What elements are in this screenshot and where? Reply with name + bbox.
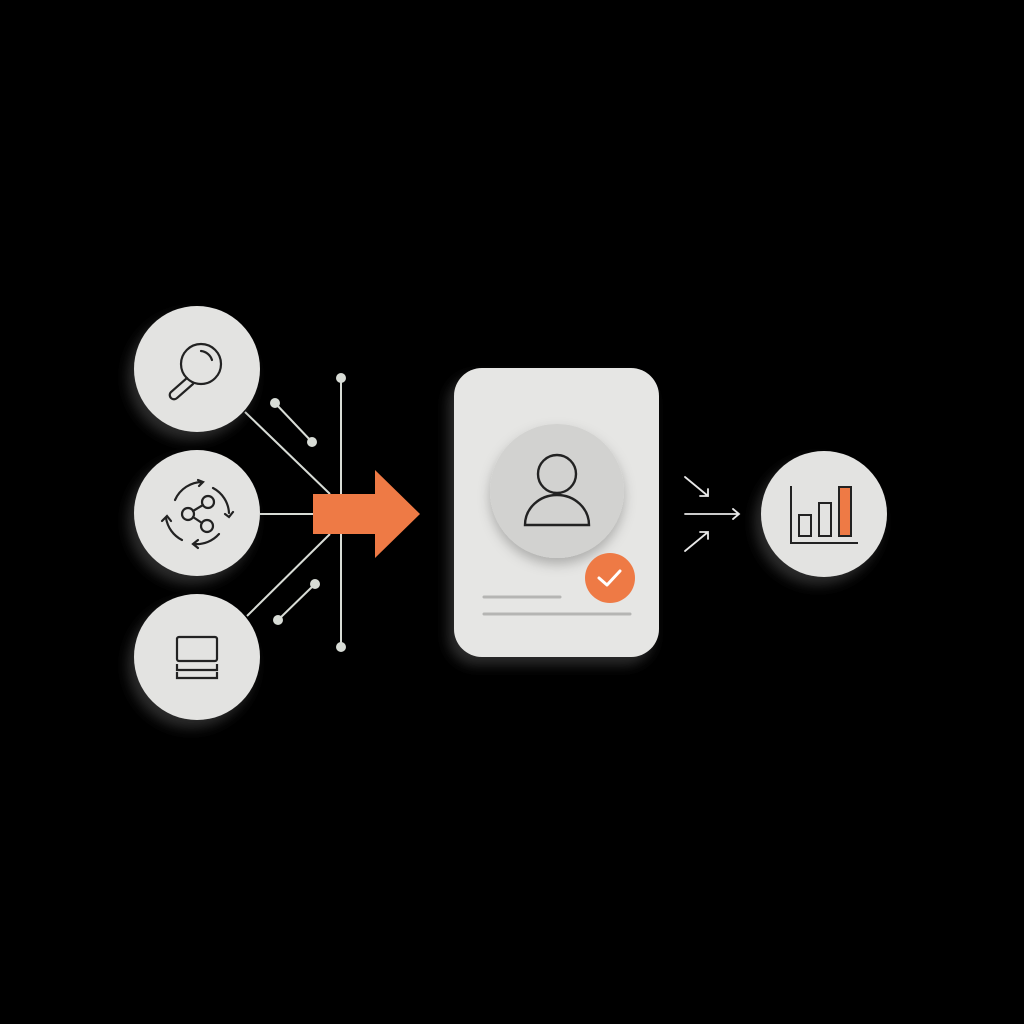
circle: search [134,306,260,432]
circle: stack [134,594,260,720]
avatar [490,424,624,558]
circle: share cycle [134,450,260,576]
connector lines [245,373,346,652]
circle: bar chart [761,451,887,577]
profile card [454,368,659,657]
text lines [484,597,630,614]
check badge [585,553,635,603]
orange arrow [313,470,420,558]
small arrows [685,477,739,551]
